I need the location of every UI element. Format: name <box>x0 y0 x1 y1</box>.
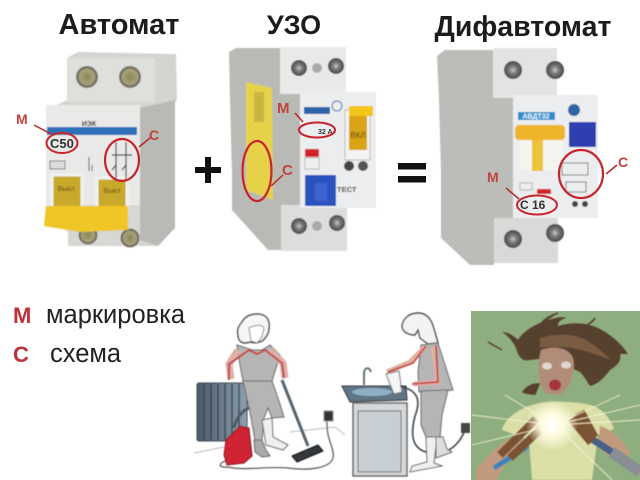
label: М marking on Дифавтомат: М <box>487 169 499 185</box>
label: М marking on Дифавтомат: C 16 <box>520 198 546 212</box>
legend: М маркировка: маркировка <box>46 301 186 329</box>
label: М marking on Автомат <box>16 111 78 153</box>
label: М marking on Автомат: C50 <box>50 136 74 151</box>
title: Автомат: Автомат <box>59 9 179 41</box>
device: УЗО: ТЕСТ <box>337 185 357 194</box>
legend: С схема: схема <box>50 340 122 368</box>
equals sign <box>398 163 426 182</box>
label: С scheme on Дифавтомат <box>559 150 628 198</box>
title: Дифавтомат: Дифавтомат <box>435 11 611 43</box>
device: УЗО <box>229 47 376 251</box>
arms <box>476 438 524 480</box>
label: С scheme on Автомат: С <box>149 127 159 143</box>
label: М marking on УЗО: 32 A <box>318 129 333 136</box>
vacuum cleaner <box>220 380 333 469</box>
title: УЗО: УЗО <box>267 10 321 40</box>
hair <box>502 317 628 386</box>
label: С scheme on УЗО <box>242 141 293 201</box>
label: С scheme on Автомат <box>105 127 159 181</box>
label: М marking on УЗО: М <box>277 100 290 117</box>
legend: С схема <box>13 340 122 368</box>
label: С scheme on УЗО: С <box>282 162 293 179</box>
device: УЗО: ВКЛ <box>350 131 366 140</box>
device: Автомат breaker: ИЭК <box>82 121 97 128</box>
dress <box>502 402 614 480</box>
photo: electrocuted girl <box>471 311 640 480</box>
illustration: woman with vacuum touching radiator <box>194 314 345 469</box>
plus sign <box>195 157 221 183</box>
radiator <box>197 383 247 441</box>
label: М marking on Автомат: М <box>16 111 28 127</box>
device: Дифавтомат <box>437 48 598 265</box>
device: Автомат breaker: Выкл <box>58 186 74 193</box>
wires <box>494 446 528 468</box>
label: М marking on УЗО <box>277 100 335 138</box>
legend <box>13 301 186 368</box>
sink cabinet <box>342 368 407 476</box>
device: Автомат breaker: Выкл <box>104 188 120 195</box>
device: Автомат breaker <box>44 52 177 247</box>
woman seated <box>229 314 288 457</box>
woman standing <box>386 313 470 472</box>
legend: С схема: С <box>13 342 29 367</box>
label: М marking on Дифавтомат <box>487 169 557 214</box>
legend: М маркировка: М <box>13 303 31 328</box>
sparks <box>472 395 640 480</box>
illustration: woman at sink <box>342 313 470 476</box>
label: С scheme on Дифавтомат: С <box>618 154 628 170</box>
girl's face <box>539 348 574 394</box>
device: Дифавтомат: АВДТ32 <box>522 114 550 120</box>
